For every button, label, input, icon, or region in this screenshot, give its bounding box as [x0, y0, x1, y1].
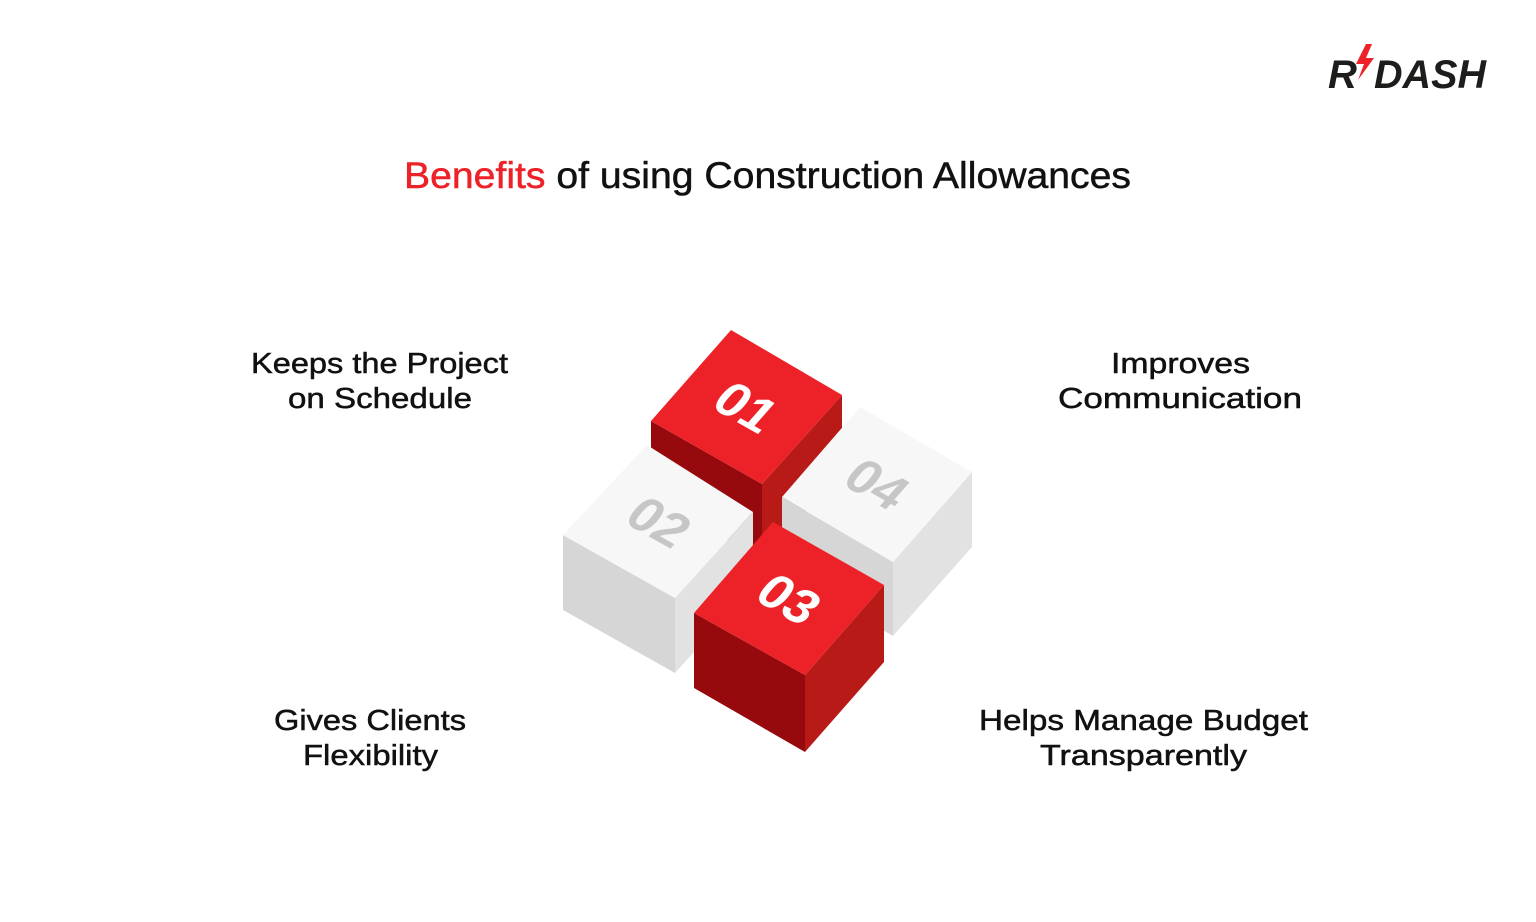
icon: lightning bolt — [1356, 44, 1374, 80]
title: Benefits of using Construction Allowances — [404, 155, 1131, 196]
cube 04 — [782, 407, 972, 636]
label: 01 Keeps the Project on Schedule: Keeps the Project — [251, 348, 508, 380]
label: 03 Helps Manage Budget Transparently: Transparently — [1040, 740, 1248, 772]
cube 02: 02 — [614, 487, 703, 559]
cube 01 — [651, 330, 842, 560]
cube 04: 04 — [832, 449, 921, 521]
label: 01 Keeps the Project on Schedule — [251, 348, 508, 415]
label: 03 Helps Manage Budget Transparently — [979, 705, 1308, 772]
label: 04 Improves Communication: Communication — [1058, 383, 1302, 415]
logo — [1328, 44, 1487, 97]
label: 04 Improves Communication — [1058, 348, 1302, 415]
cube 03: 03 — [744, 564, 833, 636]
logo: R — [1328, 53, 1357, 97]
cube 02 — [563, 445, 753, 673]
label: 02 Gives Clients Flexibility: Gives Clients — [274, 705, 466, 737]
cube 01: 01 — [701, 372, 790, 444]
label: 02 Gives Clients Flexibility — [274, 705, 466, 772]
label: 02 Gives Clients Flexibility: Flexibility — [303, 740, 439, 772]
logo: DASH — [1374, 53, 1487, 97]
label: 03 Helps Manage Budget Transparently: Helps Manage Budget — [979, 705, 1308, 737]
label: 01 Keeps the Project on Schedule: on Schedule — [288, 383, 472, 415]
label: 04 Improves Communication: Improves — [1111, 348, 1250, 380]
cube 03 — [694, 522, 884, 752]
